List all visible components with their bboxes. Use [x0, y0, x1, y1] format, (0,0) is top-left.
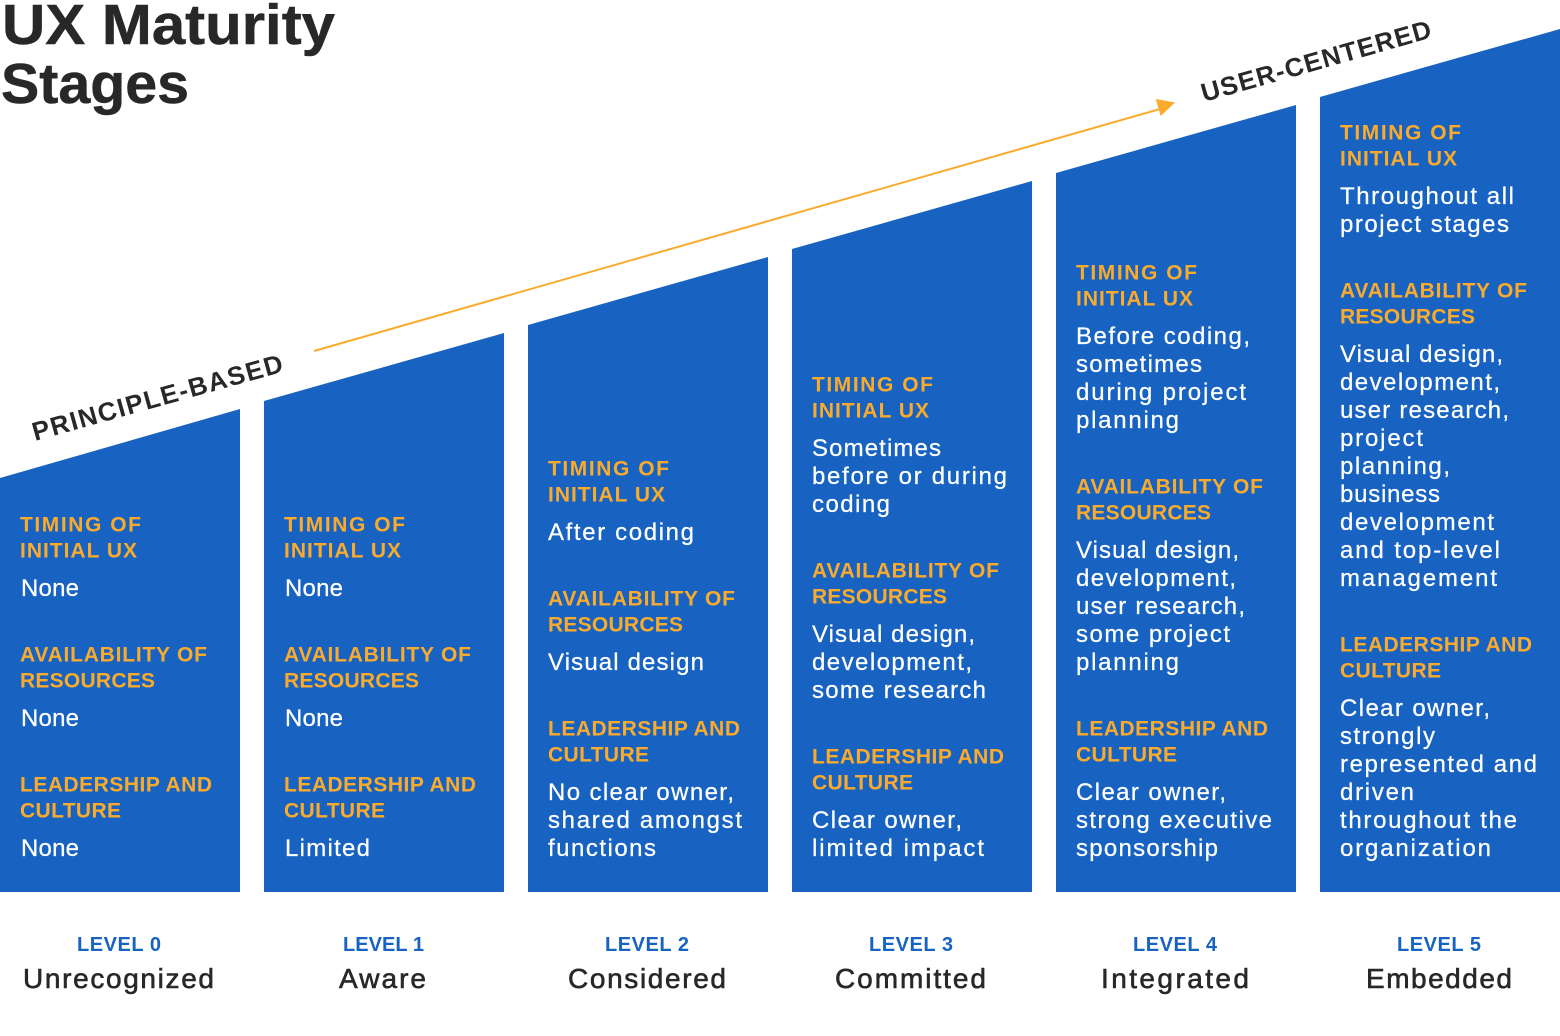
caption: level 0: Unrecognized [23, 963, 214, 994]
section: leadership and culture: CULTURE [548, 743, 649, 766]
section: leadership and culture: Clear owner, [812, 807, 962, 834]
section: leadership and culture: CULTURE [1076, 743, 1177, 766]
section: timing of initial UX: INITIAL UX [20, 539, 137, 562]
panel: level 0 [0, 409, 240, 892]
section: availability of resources: RESOURCES [812, 585, 947, 608]
section: timing of initial UX [284, 513, 405, 602]
section: timing of initial UX: None [21, 575, 79, 602]
section: leadership and culture: sponsorship [1076, 835, 1218, 862]
section: leadership and culture: shared amongst [548, 807, 742, 834]
section: availability of resources [812, 559, 999, 704]
section: timing of initial UX: INITIAL UX [812, 399, 929, 422]
section: availability of resources: development [1340, 509, 1494, 536]
section: leadership and culture [284, 773, 476, 862]
section: availability of resources: some project [1076, 621, 1230, 648]
caption: level 2: LEVEL 2 [605, 934, 689, 956]
column shape [1320, 29, 1560, 892]
column shape [792, 181, 1032, 892]
section: leadership and culture: functions [548, 835, 656, 862]
section: leadership and culture: None [21, 835, 79, 862]
section: timing of initial UX: None [285, 575, 343, 602]
section: leadership and culture: LEADERSHIP AND [20, 773, 212, 796]
section: timing of initial UX: INITIAL UX [1076, 287, 1193, 310]
panel: level 1 [264, 333, 504, 892]
caption: level 1: Aware [339, 963, 426, 994]
label: user-centered: USER-CENTERED [1197, 14, 1435, 108]
section: timing of initial UX: Before coding, [1076, 323, 1250, 350]
section: timing of initial UX [20, 513, 141, 602]
panel: level 4 [1056, 105, 1296, 892]
section: leadership and culture: CULTURE [20, 799, 121, 822]
section: availability of resources: Visual design, [1340, 341, 1503, 368]
section: leadership and culture: Clear owner, [1340, 695, 1490, 722]
section: availability of resources: None [285, 705, 343, 732]
column shape [1056, 105, 1296, 892]
panel: level 5 [1320, 29, 1560, 892]
section: leadership and culture: LEADERSHIP AND [1076, 717, 1268, 740]
panel: level 2 [528, 257, 768, 892]
section: leadership and culture: LEADERSHIP AND [1340, 633, 1532, 656]
section: availability of resources: planning, [1340, 453, 1450, 480]
section: timing of initial UX: INITIAL UX [284, 539, 401, 562]
section: availability of resources: RESOURCES [284, 669, 419, 692]
section: availability of resources: planning [1076, 649, 1179, 676]
caption: level 5: LEVEL 5 [1397, 934, 1481, 956]
section: availability of resources: Visual design, [812, 621, 975, 648]
section: timing of initial UX: INITIAL UX [1340, 147, 1457, 170]
section: leadership and culture: throughout the [1340, 807, 1517, 834]
section: leadership and culture [20, 773, 212, 862]
section: leadership and culture: CULTURE [812, 771, 913, 794]
caption: level 5 [1366, 934, 1512, 994]
section: leadership and culture [1340, 633, 1537, 862]
section: leadership and culture: limited impact [812, 835, 984, 862]
section: timing of initial UX: planning [1076, 407, 1179, 434]
section: timing of initial UX: After coding [548, 519, 694, 546]
caption: level 4 [1101, 934, 1249, 994]
section: leadership and culture: Clear owner, [1076, 779, 1226, 806]
section: availability of resources [20, 643, 207, 732]
section: timing of initial UX: INITIAL UX [548, 483, 665, 506]
section: availability of resources [548, 587, 735, 676]
section: timing of initial UX: TIMING OF [1076, 261, 1197, 284]
section: leadership and culture: organization [1340, 835, 1491, 862]
section: timing of initial UX: TIMING OF [548, 457, 669, 480]
section: availability of resources: user research, [1340, 397, 1509, 424]
section: availability of resources: AVAILABILITY OF [20, 643, 207, 666]
section: availability of resources: and top-level [1340, 537, 1500, 564]
section: availability of resources [284, 643, 471, 732]
caption: level 3: Committed [835, 963, 986, 994]
section: availability of resources: management [1340, 565, 1497, 592]
section: availability of resources: development, [812, 649, 972, 676]
caption: level 2: Considered [568, 963, 726, 994]
section: leadership and culture: CULTURE [284, 799, 385, 822]
caption: level 3: LEVEL 3 [869, 934, 953, 956]
section: availability of resources: AVAILABILITY OF [548, 587, 735, 610]
caption: level 1: LEVEL 1 [343, 934, 424, 956]
section: leadership and culture [548, 717, 742, 862]
section: leadership and culture: CULTURE [1340, 659, 1441, 682]
column shape [0, 409, 240, 892]
section: leadership and culture: LEADERSHIP AND [812, 745, 1004, 768]
section: availability of resources: AVAILABILITY OF [812, 559, 999, 582]
section: timing of initial UX: during project [1076, 379, 1246, 406]
section: leadership and culture: LEADERSHIP AND [548, 717, 740, 740]
section: availability of resources: None [21, 705, 79, 732]
section: timing of initial UX: Throughout all [1340, 183, 1514, 210]
section: availability of resources: business [1340, 481, 1440, 508]
section: availability of resources: development, [1340, 369, 1500, 396]
section: availability of resources: RESOURCES [1340, 305, 1475, 328]
section: availability of resources: AVAILABILITY OF [1340, 279, 1527, 302]
section: timing of initial UX [548, 457, 694, 546]
title [1, 0, 335, 116]
caption: level 3 [835, 934, 986, 994]
section: availability of resources: RESOURCES [548, 613, 683, 636]
caption: level 1 [339, 934, 426, 994]
section: timing of initial UX: before or during [812, 463, 1007, 490]
section: leadership and culture: strongly [1340, 723, 1435, 750]
section: availability of resources: Visual design, [1076, 537, 1239, 564]
section: availability of resources [1340, 279, 1527, 592]
section: leadership and culture: Limited [285, 835, 370, 862]
caption: level 4: Integrated [1101, 963, 1249, 994]
panel: level 3 [792, 181, 1032, 892]
section: availability of resources: AVAILABILITY OF [284, 643, 471, 666]
caption: level 0 [23, 934, 214, 994]
section: timing of initial UX: TIMING OF [1340, 121, 1461, 144]
section: timing of initial UX: TIMING OF [812, 373, 933, 396]
section: timing of initial UX [812, 373, 1007, 518]
section: leadership and culture [1076, 717, 1272, 862]
label: principle-based: PRINCIPLE-BASED [29, 348, 286, 447]
section: leadership and culture: No clear owner, [548, 779, 734, 806]
caption: level 5: Embedded [1366, 963, 1512, 994]
section: availability of resources: some research [812, 677, 986, 704]
column shape [264, 333, 504, 892]
section: timing of initial UX: project stages [1340, 211, 1509, 238]
section: availability of resources: RESOURCES [1076, 501, 1211, 524]
title: Stages [1, 52, 189, 116]
section: availability of resources: user research, [1076, 593, 1245, 620]
section: availability of resources: RESOURCES [20, 669, 155, 692]
section: leadership and culture: strong executive [1076, 807, 1272, 834]
section: availability of resources: AVAILABILITY OF [1076, 475, 1263, 498]
section: timing of initial UX: Sometimes [812, 435, 941, 462]
arrow: maturity progression [314, 99, 1175, 351]
caption: level 2 [568, 934, 726, 994]
section: leadership and culture [812, 745, 1004, 862]
caption: level 4: LEVEL 4 [1133, 934, 1218, 956]
section: timing of initial UX [1076, 261, 1250, 434]
section: leadership and culture: LEADERSHIP AND [284, 773, 476, 796]
section: leadership and culture: driven [1340, 779, 1414, 806]
column shape [528, 257, 768, 892]
section: availability of resources [1076, 475, 1263, 676]
section: availability of resources: Visual design [548, 649, 704, 676]
section: timing of initial UX: TIMING OF [20, 513, 141, 536]
section: availability of resources: project [1340, 425, 1423, 452]
section: availability of resources: development, [1076, 565, 1236, 592]
section: leadership and culture: represented and [1340, 751, 1537, 778]
caption: level 0: LEVEL 0 [77, 934, 161, 956]
section: timing of initial UX: coding [812, 491, 890, 518]
section: timing of initial UX [1340, 121, 1514, 238]
section: timing of initial UX: TIMING OF [284, 513, 405, 536]
section: timing of initial UX: sometimes [1076, 351, 1202, 378]
